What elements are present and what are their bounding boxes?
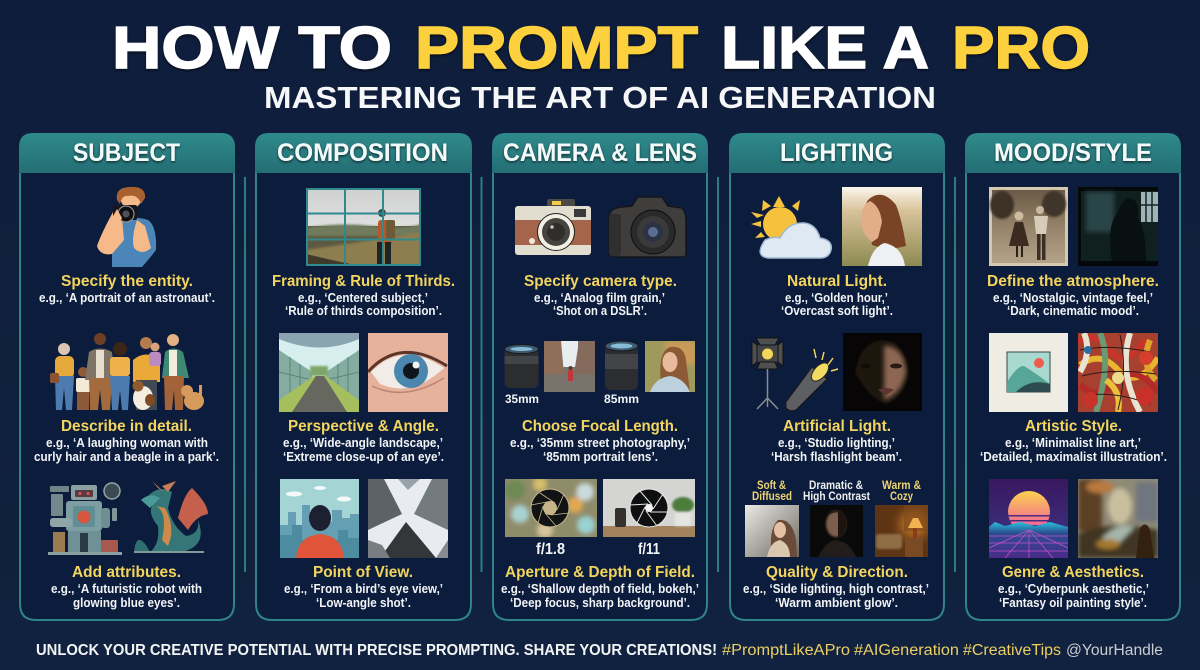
header: subject: SUBJECT [73,139,180,167]
text: perspective [283,418,444,464]
icon: analog camera [515,199,591,255]
text: add attributes: e.g., ‘A futuristic robot with [51,582,202,596]
header: lighting [729,133,945,173]
text: describe in detail: Describe in detail. [61,418,192,435]
header: camera and lens: CAMERA & LENS [503,139,697,167]
label: warm and cozy: Warm & [882,480,921,492]
text: framing [272,273,455,318]
text: quality and direction: ‘Warm ambient glow’. [775,596,898,610]
image: soft diffused portrait [745,505,799,557]
text: describe in detail: e.g., ‘A laughing woman with [46,436,208,450]
text: define the atmosphere: e.g., ‘Nostalgic, vintage feel,’ [993,291,1153,305]
text: aperture: ‘Deep focus, sharp background’. [510,596,690,610]
text: perspective: ‘Extreme close-up of an eye’. [283,450,444,464]
text: point of view: Point of View. [313,564,413,581]
footer call to action: @YourHandle [1066,642,1163,659]
text: natural light: e.g., ‘Golden hour,’ [785,291,888,305]
text: artistic style: ‘Detailed, maximalist illustration’. [980,450,1167,464]
subtitle: MASTERING THE ART OF AI GENERATION [264,80,936,115]
title: PRO [952,15,1090,81]
label: warm and cozy: Cozy [890,491,913,503]
text: aperture [501,564,699,610]
image: rule of thirds landscape [306,188,421,266]
footer call to action [36,642,1163,659]
title: HOW TO [112,15,392,81]
text: specify camera type: e.g., ‘Analog film grain,’ [534,291,665,305]
title: LIKE A [721,15,929,81]
image: dramatic portrait [810,505,863,557]
image: wide-angle corridor [279,333,359,412]
image: street photo [544,341,595,392]
header: mood and style: MOOD/STYLE [994,139,1152,167]
image: f/1.8 bokeh with aperture [505,479,597,537]
text: describe in detail [34,418,219,464]
text: focal length: e.g., ‘35mm street photography,’ [510,436,690,450]
title [112,15,1090,81]
panel: camera and lens [492,133,708,620]
label: f/11: f/11 [638,541,660,558]
text: artificial light: ‘Harsh flashlight beam’. [771,450,902,464]
text: artificial light: Artificial Light. [783,418,891,435]
text: define the atmosphere: ‘Dark, cinematic mood’. [1007,304,1139,318]
header: lighting: LIGHTING [780,139,893,167]
label: dramatic and high contrast [803,480,870,503]
text: point of view: ‘Low-angle shot’. [316,596,411,610]
text: artistic style: e.g., ‘Minimalist line art,’ [1005,436,1141,450]
panel: composition [255,133,472,620]
label: dramatic and high contrast: Dramatic & [809,480,863,492]
text: specify the entity [39,273,215,305]
label: soft and diffused: Soft & [757,480,786,492]
icon: DSLR camera [609,197,686,257]
text: natural light: Natural Light. [787,273,887,290]
text: artistic style [980,418,1167,464]
text: define the atmosphere: Define the atmosphere. [987,273,1159,290]
text: define the atmosphere [987,273,1159,318]
text: perspective: e.g., ‘Wide-angle landscape,’ [283,436,443,450]
text: describe in detail: curly hair and a beagle in a park’. [34,450,219,464]
image: harsh light portrait [843,333,922,411]
text: aperture: e.g., ‘Shallow depth of field, bokeh,’ [501,582,699,596]
header: composition: COMPOSITION [277,139,448,167]
panel: mood and style [965,133,1181,620]
image: f/11 sharp with aperture [603,479,695,537]
image: warm cozy room [875,505,928,557]
icon: sun and cloud [751,196,831,258]
illustration: person facing city [280,479,359,558]
image: minimalist line art [989,333,1068,412]
footer call to action: #CreativeTips [963,642,1061,659]
footer call to action: #AIGeneration [854,642,959,659]
illustration: dragon [134,481,208,553]
label: soft and diffused: Diffused [752,491,792,503]
label: warm and cozy [882,480,921,503]
image: maximalist illustration [1078,333,1158,412]
text: quality and direction: Quality & Direction. [766,564,908,581]
text: quality and direction: e.g., ‘Side lighting, high contrast,’ [743,582,929,596]
label: 35mm: 35mm [505,392,539,406]
text: point of view [284,564,443,610]
text: framing: e.g., ‘Centered subject,’ [298,291,428,305]
text: specify the entity: e.g., ‘A portrait of an astronaut’. [39,291,215,305]
text: aperture: Aperture & Depth of Field. [505,564,695,581]
title: PROMPT [415,15,698,81]
header: camera and lens [492,133,708,173]
icon: photographer [97,186,156,267]
text: artificial light: e.g., ‘Studio lighting,’ [778,436,895,450]
text: framing: Framing & Rule of Thirds. [272,273,455,290]
text: focal length [510,418,690,464]
header: subject [19,133,235,173]
image: eye close-up [368,333,448,412]
header: composition [255,133,472,173]
text: genre and aesthetics: Genre & Aesthetics. [1002,564,1144,581]
illustration: diverse people and dogs [50,333,204,410]
image: golden hour portrait [842,187,922,266]
label: 85mm: 85mm [604,392,639,406]
text: add attributes: Add attributes. [72,564,181,581]
text: quality and direction [743,564,929,610]
text: add attributes: glowing blue eyes’. [73,596,180,610]
text: perspective: Perspective & Angle. [288,418,439,435]
text: specify the entity: Specify the entity. [61,273,193,290]
panel: subject [19,133,235,620]
illustration: robot [48,482,122,555]
label: dramatic and high contrast: High Contrast [803,491,870,503]
image: fantasy oil painting [1078,479,1158,558]
text: focal length: Choose Focal Length. [522,418,678,435]
illustration: synthwave sunset [989,479,1068,558]
text: natural light [781,273,893,318]
icon: 35mm lens [504,344,538,388]
label: f/1.8: f/1.8 [536,541,565,558]
text: specify camera type [524,273,677,318]
footer call to action: UNLOCK YOUR CREATIVE POTENTIAL WITH PRECISE PROMPTING. SHARE YOUR CREATIONS! [36,642,717,659]
icon: 85mm lens [605,341,638,390]
panel: lighting [729,133,945,620]
text: genre and aesthetics [998,564,1149,610]
text: specify camera type: ‘Shot on a DSLR’. [553,304,647,318]
text: point of view: e.g., ‘From a bird’s eye view,’ [284,582,443,596]
text: framing: ‘Rule of thirds composition’. [285,304,442,318]
text: focal length: ‘85mm portrait lens’. [543,450,658,464]
text: genre and aesthetics: e.g., ‘Cyberpunk aesthetic,’ [998,582,1149,596]
text: artistic style: Artistic Style. [1025,418,1122,435]
text: genre and aesthetics: ‘Fantasy oil painting style’. [999,596,1147,610]
label: soft and diffused [752,480,792,503]
footer call to action: #PromptLikeAPro [722,642,850,659]
image: dark cinematic photo [1078,187,1158,266]
text: specify camera type: Specify camera type. [524,273,677,290]
icon: flashlight [786,349,838,411]
text: artificial light [771,418,902,464]
text: natural light: ‘Overcast soft light’. [781,304,893,318]
text: add attributes [51,564,202,610]
image: vintage sepia photo [989,187,1068,266]
image: low-angle skyscrapers [368,479,448,558]
header: mood and style [965,133,1181,173]
image: portrait photo [645,341,695,392]
icon: studio light [752,338,783,409]
